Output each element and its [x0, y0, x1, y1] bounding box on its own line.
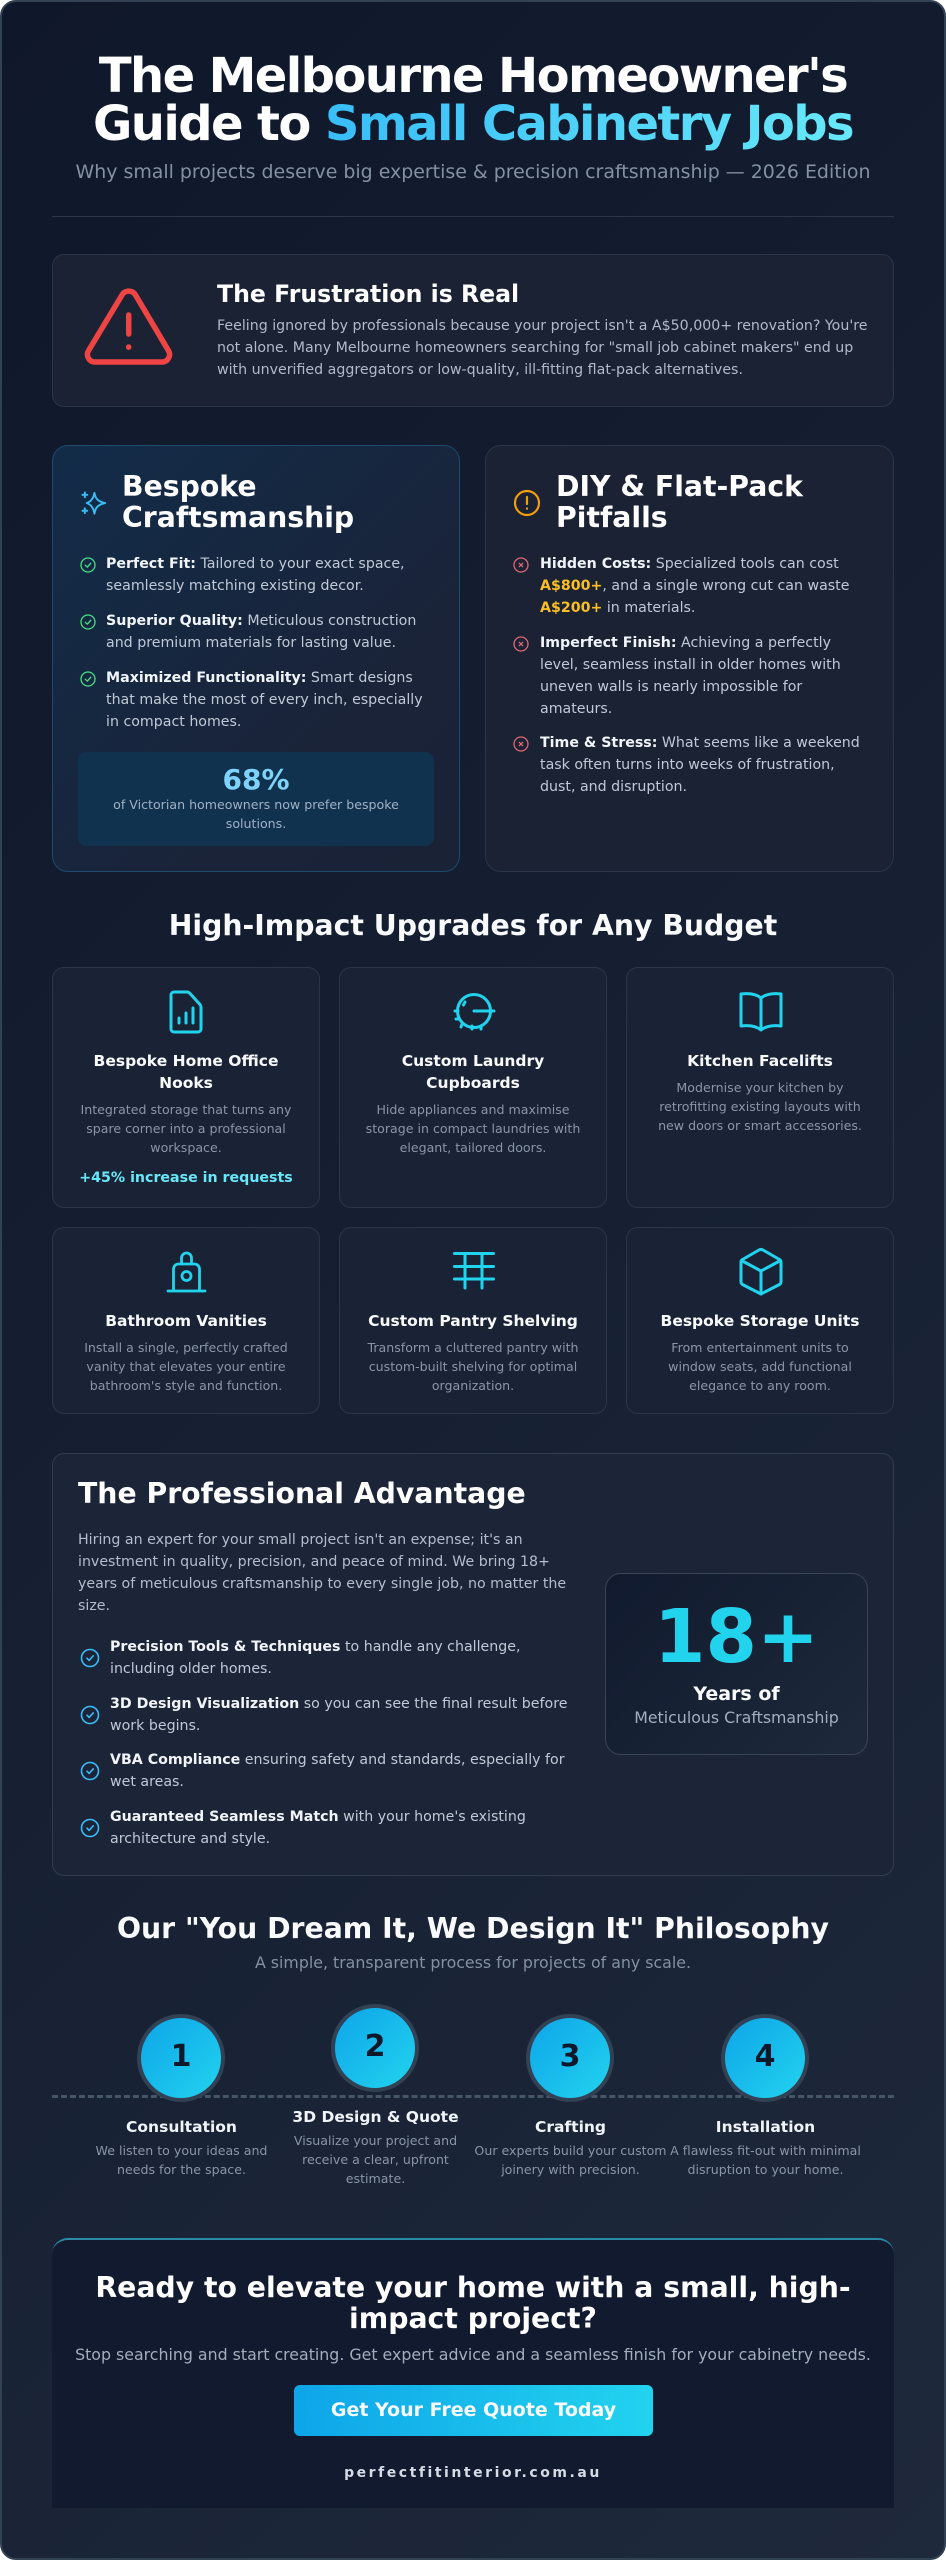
step 2: 3D Design & Quote — [292, 2108, 459, 2126]
card: kitchen facelifts: Modernise your kitchen by — [676, 1080, 844, 1095]
panel: the frustration is real — [52, 254, 894, 407]
icon: laundry drum — [454, 993, 496, 1030]
heading: high-impact upgrades: High-Impact Upgrades for Any Budget — [169, 909, 777, 942]
intro text: Hiring an expert for your small project isn't an expense; it's an — [78, 1532, 523, 1548]
panel: the professional advantage — [52, 1453, 894, 1876]
card: pantry shelving: Custom Pantry Shelving — [368, 1312, 578, 1330]
card: storage units: From entertainment units to — [671, 1340, 849, 1355]
stat box: 18+ years: 18+ — [654, 1594, 819, 1680]
list item: imperfect finish: level, seamless install in older homes with — [540, 657, 841, 673]
card: laundry cupboards: Hide appliances and maximise — [376, 1102, 570, 1117]
number badge — [526, 2014, 614, 2102]
step 3 — [474, 2014, 667, 2176]
list item: imperfect finish: uneven walls is nearly impossible for — [540, 679, 802, 695]
card: laundry cupboards: Cupboards — [426, 1074, 520, 1092]
card: pantry shelving — [339, 1227, 607, 1414]
list item: hidden costs: A$200+ in materials. — [540, 600, 695, 616]
heading: The Professional Advantage — [78, 1477, 526, 1510]
list item: maximized functionality: in compact homes. — [106, 714, 241, 730]
heading: impact project? — [349, 2302, 597, 2334]
list item: superior quality: and premium materials for lasting value. — [106, 635, 396, 651]
card: laundry cupboards: storage in compact laundries with — [366, 1121, 580, 1136]
step 2: estimate. — [346, 2170, 405, 2186]
website: perfectfitinterior.com.au — [344, 2465, 602, 2481]
number badge: 2 — [365, 2029, 385, 2064]
list item: imperfect finish — [513, 635, 841, 717]
card: laundry cupboards: elegant, tailored doors. — [400, 1140, 546, 1155]
list item: precision tools: including older homes. — [110, 1661, 272, 1677]
number badge — [137, 2014, 225, 2102]
list item: superior quality: Superior Quality: Meticulous construction — [106, 613, 416, 629]
icon: alert circle — [514, 490, 540, 516]
list item: time and stress: task often turns into weeks of frustration, — [540, 757, 835, 773]
card: laundry cupboards: Custom Laundry — [402, 1052, 544, 1070]
card: pantry shelving: Transform a cluttered pantry with — [367, 1340, 579, 1355]
step 2: receive a clear, upfront — [302, 2152, 449, 2166]
heading — [122, 470, 354, 534]
icon: vanity bottle — [166, 1252, 206, 1292]
section: philosophy — [52, 1912, 894, 2186]
card: home office nooks: workspace. — [150, 1140, 222, 1155]
stat box: 68%: solutions. — [226, 816, 286, 831]
stat: +45% increase in requests — [79, 1170, 293, 1186]
step 4: disruption to your home. — [687, 2162, 844, 2176]
panel: call to action — [52, 2238, 894, 2508]
card: storage units — [626, 1227, 894, 1414]
step 1 — [96, 2014, 267, 2176]
list item: seamless match — [80, 1809, 526, 1847]
title: Guide to Small Cabinetry Jobs — [93, 96, 853, 152]
number badge: 3 — [560, 2039, 580, 2074]
number badge: 4 — [755, 2039, 775, 2074]
stat box: 68% — [78, 752, 434, 846]
card: storage units: Bespoke Storage Units — [660, 1312, 860, 1330]
list item: precision tools: Precision Tools & Techniques to handle any challenge, — [110, 1639, 521, 1655]
icon: sparkles — [82, 492, 106, 515]
heading: Our "You Dream It, We Design It" Philosophy — [117, 1912, 829, 1945]
list item: maximized functionality: that make the most of every inch, especially — [106, 692, 423, 708]
step 4 — [670, 2014, 861, 2176]
list item: 3d design — [80, 1696, 567, 1734]
text — [217, 318, 868, 378]
card: pantry shelving: custom-built shelving for optimal — [369, 1359, 577, 1374]
list item: hidden costs — [513, 556, 849, 616]
icon: document chart — [170, 990, 202, 1034]
list item: vba compliance — [80, 1752, 565, 1790]
stat box: 18+ years — [605, 1573, 868, 1755]
heading: DIY & Flat-Pack — [556, 470, 803, 503]
list item: seamless match: architecture and style. — [110, 1831, 270, 1847]
button: Get Your Free Quote Today — [331, 2399, 616, 2421]
button — [294, 2385, 653, 2436]
text: Feeling ignored by professionals because your project isn't a A$50,000+ renovation? You're — [217, 318, 868, 334]
number badge — [331, 2004, 419, 2092]
list item: imperfect finish: amateurs. — [540, 701, 612, 717]
card: home office nooks — [52, 967, 320, 1208]
title: The Melbourne Homeowner's — [99, 48, 847, 104]
list item: time and stress: Time & Stress: What seems like a weekend — [540, 735, 860, 751]
list item: 3d design: work begins. — [110, 1718, 200, 1734]
heading: Pitfalls — [556, 501, 668, 534]
card: bathroom vanities: Install a single, perfectly crafted — [84, 1340, 288, 1355]
text: not alone. Many Melbourne homeowners searching for "small job cabinet makers" end up — [217, 340, 853, 356]
step 1: Consultation — [126, 2118, 237, 2136]
heading: The Frustration is Real — [217, 280, 519, 308]
icon: warning triangle — [84, 288, 172, 365]
card: bathroom vanities: vanity that elevates your entire — [86, 1359, 286, 1374]
step 3: joinery with precision. — [501, 2162, 640, 2176]
card: home office nooks: Nooks — [159, 1074, 213, 1092]
stat box: 68%: 68% — [222, 763, 290, 796]
list item: perfect fit: seamlessly matching existing decor. — [106, 578, 364, 594]
card: home office nooks: spare corner into a professional — [86, 1121, 286, 1136]
step 3: Crafting — [535, 2118, 606, 2136]
stat box: 68%: of Victorian homeowners now prefer bespoke — [113, 797, 399, 812]
text: Stop searching and start creating. Get expert advice and a seamless finish for your cabinetry needs. — [75, 2345, 871, 2364]
list item: maximized functionality — [80, 670, 423, 730]
step 4: Installation — [716, 2118, 815, 2136]
heading — [556, 470, 804, 534]
number badge — [721, 2014, 809, 2102]
intro text: investment in quality, precision, and peace of mind. We bring 18+ — [78, 1554, 550, 1570]
stat box: 18+ years: Meticulous Craftsmanship — [634, 1708, 839, 1727]
header — [52, 48, 894, 217]
card: bathroom vanities — [52, 1227, 320, 1414]
text: with unverified aggregators or low-quality, ill-fitting flat-pack alternatives. — [217, 362, 743, 378]
panel: bespoke craftsmanship — [52, 445, 460, 872]
list item: hidden costs: A$800+, and a single wrong cut can waste — [540, 578, 849, 594]
heading: Bespoke — [122, 470, 257, 503]
list item: time and stress — [513, 735, 860, 795]
list item: 3d design: 3D Design Visualization so you can see the final result before — [110, 1696, 567, 1712]
list item: perfect fit: Perfect Fit: Tailored to your exact space, — [106, 556, 405, 572]
card: kitchen facelifts — [626, 967, 894, 1208]
list item: superior quality — [80, 613, 416, 651]
list item: precision tools — [80, 1639, 521, 1677]
step 1: We listen to your ideas and — [96, 2142, 267, 2158]
step 4: A flawless fit-out with minimal — [670, 2142, 861, 2158]
icon: open book — [740, 992, 782, 1032]
card: storage units: elegance to any room. — [689, 1378, 831, 1393]
icon: cube — [740, 1248, 782, 1296]
card: home office nooks: Integrated storage that turns any — [81, 1102, 291, 1117]
card: pantry shelving: organization. — [432, 1378, 514, 1393]
list item: time and stress: dust, and disruption. — [540, 779, 687, 795]
list item: imperfect finish: Imperfect Finish: Achieving a perfectly — [540, 635, 831, 651]
card: bathroom vanities: Bathroom Vanities — [105, 1312, 267, 1330]
step 1: needs for the space. — [117, 2162, 246, 2176]
subheading: A simple, transparent process for projects of any scale. — [255, 1953, 691, 1972]
list item: perfect fit — [80, 556, 405, 594]
icon: shelving grid — [453, 1252, 495, 1290]
step 3: Our experts build your custom — [474, 2142, 667, 2158]
list item: vba compliance: wet areas. — [110, 1774, 184, 1790]
stat box: 18+ years: Years of — [693, 1683, 780, 1705]
intro text — [78, 1532, 566, 1614]
card: laundry cupboards — [339, 967, 607, 1208]
step 2 — [292, 2004, 459, 2186]
card: storage units: window seats, add functional — [668, 1359, 852, 1374]
heading: Craftsmanship — [122, 501, 354, 534]
card: kitchen facelifts: new doors or smart accessories. — [658, 1118, 862, 1133]
number badge: 1 — [171, 2039, 191, 2074]
list item: vba compliance: VBA Compliance ensuring safety and standards, especially for — [110, 1752, 565, 1768]
list item: seamless match: Guaranteed Seamless Match with your home's existing — [110, 1809, 526, 1825]
card: bathroom vanities: bathroom's style and function. — [90, 1378, 282, 1393]
step 2: Visualize your project and — [294, 2132, 457, 2148]
heading — [95, 2270, 851, 2334]
subtitle: Why small projects deserve big expertise & precision craftsmanship — 2026 Edition — [76, 161, 870, 183]
card: home office nooks: Bespoke Home Office — [94, 1052, 278, 1070]
heading: Ready to elevate your home with a small, high- — [95, 2270, 851, 2304]
card: kitchen facelifts: Kitchen Facelifts — [687, 1052, 833, 1070]
intro text: years of meticulous craftsmanship to every single job, no matter the — [78, 1576, 566, 1592]
list item: hidden costs: Hidden Costs: Specialized tools can cost — [540, 556, 839, 572]
panel: diy and flat-pack pitfalls — [485, 445, 894, 872]
intro text: size. — [78, 1598, 110, 1614]
title — [93, 48, 853, 152]
card: kitchen facelifts: retrofitting existing layouts with — [659, 1099, 861, 1114]
list item: maximized functionality: Maximized Functionality: Smart designs — [106, 670, 413, 686]
